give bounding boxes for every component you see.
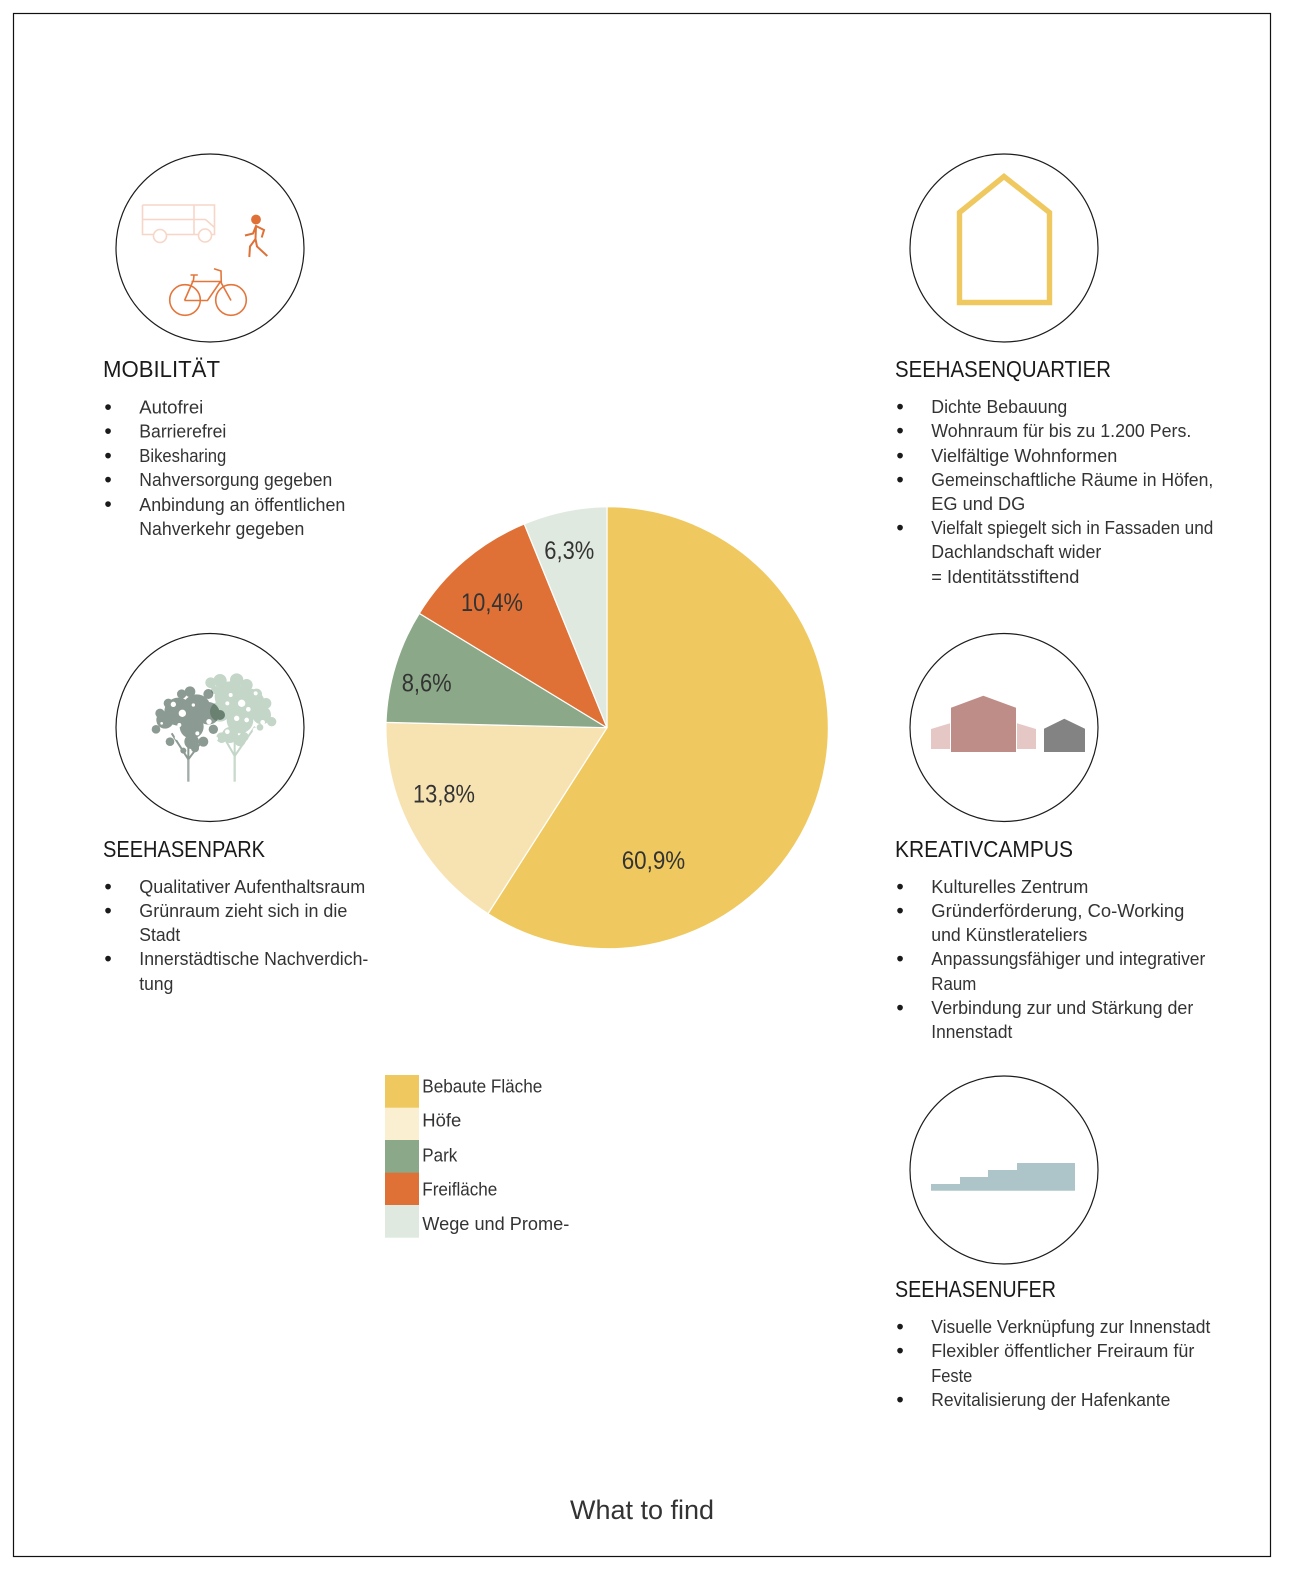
pie labels: 6,3% [544,537,594,565]
list: Seehasenquartier: • [896,396,904,419]
pie labels: 60,9% [622,847,685,875]
list: Kreativcampus: Anpassungsfähiger und integrativer [931,949,1205,969]
list: Kreativcampus: • [896,876,904,899]
list: Mobilität: • [104,445,112,468]
list: Seehasenquartier: • [896,420,904,443]
legend item: Freifläche [385,1173,497,1205]
list: Mobilität: • [104,493,112,516]
list: Kreativcampus: • [896,900,904,923]
pie labels [402,537,685,875]
panel: Mobilität [103,154,345,539]
list: Seehasenufer: • [896,1340,904,1363]
icon: pedestrian [245,215,267,257]
list: Seehasenufer [896,1316,1210,1412]
list: Seehasenpark: • [104,876,112,899]
icon: campus buildings in circle [910,634,1098,822]
legend item: Bebaute Fläche [385,1075,542,1108]
heading: Seehasenpark: SEEHASENPARK [103,836,266,862]
list: Mobilität: Bikesharing [139,446,226,466]
list: Mobilität [104,396,345,539]
list: Kreativcampus: und Künstlerateliers [931,925,1087,945]
slice: Wege und Promenaden 6,3% [524,507,607,728]
icon: dark tree [152,686,225,782]
icon: light tree [205,673,276,782]
slice: Freifläche 10,4% [419,524,607,728]
list: Kreativcampus: Verbindung zur und Stärkung der [931,998,1193,1018]
list: Mobilität: • [104,396,112,419]
list: Mobilität: • [104,420,112,443]
slice: Park 8,6% [386,613,607,728]
icon: mobility circle with bus, pedestrian and bicycle [116,154,304,342]
list: Seehasenquartier: • [896,469,904,492]
list: Kreativcampus: Innenstadt [931,1022,1012,1042]
list: Seehasenufer: • [896,1389,904,1412]
pie labels: 10,4% [461,589,523,617]
list: Seehasenpark: Grünraum zieht sich in die [139,901,347,921]
legend item: Park [385,1140,458,1173]
icon: bus [142,205,214,242]
list: Seehasenquartier: Vielfalt spiegelt sich in Fassaden und [931,518,1213,538]
slice: Höfe 13,8% [386,722,607,914]
list: Seehasenquartier: • [896,445,904,468]
list: Seehasenpark: • [104,948,112,971]
list: Seehasenquartier: Dichte Bebauung [931,397,1067,417]
list: Seehasenquartier [896,396,1213,587]
list: Mobilität: • [104,469,112,492]
list: Seehasenpark: Qualitativer Aufenthaltsraum [139,877,365,897]
legend item: Freifläche: Freifläche [422,1180,497,1200]
list: Mobilität: Nahversorgung gegeben [139,470,332,490]
icon: stepped waterfront in circle [910,1076,1098,1264]
icon: trees in circle [116,634,304,822]
heading: Seehasenufer: SEEHASENUFER [895,1276,1056,1302]
legend item: Wege und Prome-: Wege und Prome- [422,1214,569,1234]
list: Seehasenufer: • [896,1316,904,1339]
heading: Seehasenquartier: SEEHASENQUARTIER [895,356,1111,382]
list: Kreativcampus: • [896,997,904,1020]
list: Mobilität: Anbindung an öffentlichen [139,495,345,515]
list: Seehasenufer: Revitalisierung der Hafenkante [931,1390,1170,1410]
list: Seehasenpark: tung [139,974,173,994]
title: What to find [570,1495,714,1525]
list: Mobilität: Autofrei [139,398,203,418]
list: Seehasenquartier: = Identitätsstiftend [931,567,1079,587]
heading: Kreativcampus: KREATIVCAMPUS [895,836,1073,862]
legend item: Höfe: Höfe [422,1110,461,1130]
list: Seehasenquartier: Vielfältige Wohnformen [931,446,1117,466]
list: Seehasenquartier: Gemeinschaftliche Räume in Höfen, [931,470,1213,490]
list: Kreativcampus: Raum [931,974,976,994]
legend item: Bebaute Fläche: Bebaute Fläche [422,1076,542,1096]
legend item: Wege und Prome- [385,1205,569,1238]
list: Kreativcampus: Gründerförderung, Co-Working [931,901,1184,921]
list: Kreativcampus [896,876,1205,1042]
panel: Seehasenufer [895,1076,1210,1412]
list: Seehasenquartier: EG und DG [931,494,1025,514]
list: Seehasenpark [104,876,368,994]
list: Seehasenquartier: • [896,517,904,540]
list: Mobilität: Nahverkehr gegeben [139,519,304,539]
list: Seehasenufer: Visuelle Verknüpfung zur Innenstadt [931,1317,1210,1337]
list: Kreativcampus: Kulturelles Zentrum [931,877,1088,897]
slice: Bebaute Fläche 60,9% [488,507,828,949]
legend [385,1075,569,1238]
list: Seehasenpark: Innerstädtische Nachverdich- [139,949,368,969]
pie labels: 8,6% [402,670,452,698]
panel: Seehasenpark [103,634,368,994]
list: Seehasenpark: • [104,900,112,923]
list: Seehasenufer: Flexibler öffentlicher Freiraum für [931,1341,1194,1361]
icon: bicycle [170,269,246,315]
legend item: Höfe [385,1108,461,1140]
list: Seehasenquartier: Dachlandschaft wider [931,542,1101,562]
panel: Seehasenquartier [895,154,1213,587]
panel: Kreativcampus [895,634,1205,1042]
pie chart [386,507,828,949]
heading: Mobilität: MOBILITÄT [103,356,220,382]
list: Seehasenpark: Stadt [139,925,180,945]
pie labels: 13,8% [413,780,475,808]
icon: house outline in circle [910,154,1098,342]
list: Kreativcampus: • [896,948,904,971]
list: Mobilität: Barrierefrei [139,422,226,442]
list: Seehasenquartier: Wohnraum für bis zu 1.200 Pers. [931,421,1191,441]
legend item: Park: Park [422,1146,458,1166]
list: Seehasenufer: Feste [931,1366,972,1386]
